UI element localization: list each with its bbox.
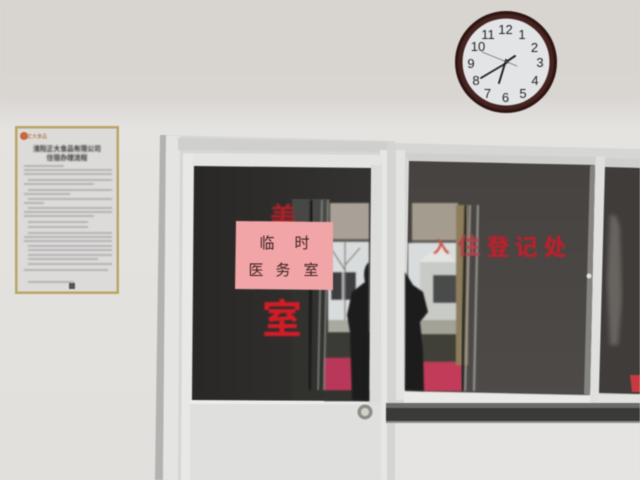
door glass: 美 <box>270 202 296 232</box>
clock numerals: 7 <box>484 86 491 101</box>
temporary clinic paper sign: 临 <box>259 235 275 252</box>
clock numerals: 1 <box>518 27 526 42</box>
clock numerals: 8 <box>472 73 480 88</box>
window glass left pane <box>405 161 595 395</box>
temporary clinic paper sign: 务 <box>275 262 291 279</box>
clock numerals: 12 <box>498 22 513 37</box>
poster logo <box>20 132 28 140</box>
poster heading: 淮阳正大食品有限公司 <box>33 144 101 153</box>
window glass right pane <box>599 167 640 394</box>
clock numerals: 3 <box>536 55 544 70</box>
door outer frame <box>155 135 395 480</box>
clock numerals: 10 <box>471 39 485 54</box>
clock numerals: 2 <box>531 40 538 55</box>
clock numerals: 5 <box>519 86 527 101</box>
silhouette reflection right of door <box>405 272 428 391</box>
notice poster: 正大食品 <box>27 133 47 140</box>
door leaf <box>181 153 382 480</box>
wall clock <box>455 11 557 113</box>
door knob <box>358 404 372 420</box>
red window lettering: 住 <box>458 233 480 259</box>
notice poster <box>15 126 119 294</box>
temporary clinic paper sign: 医 <box>248 262 264 279</box>
window latch <box>586 274 592 278</box>
temporary clinic paper sign: 时 <box>294 235 310 252</box>
sliding door rails <box>465 205 478 391</box>
notice poster: 住宿办理流程 <box>47 153 88 162</box>
red window lettering: 处 <box>544 234 566 260</box>
clock numerals <box>467 22 544 105</box>
door glass <box>192 166 371 401</box>
door handles reflection <box>318 200 328 390</box>
outdoor view through door <box>324 203 369 401</box>
red window lettering: 入 <box>432 238 450 257</box>
clock numerals: 6 <box>502 90 509 105</box>
outdoor view through window <box>408 203 468 391</box>
clock numerals: 4 <box>531 73 539 88</box>
clock numerals: 11 <box>481 27 495 42</box>
temporary clinic paper sign: 室 <box>303 262 319 279</box>
clock hands <box>481 52 517 83</box>
red window lettering: 登 <box>486 234 510 260</box>
silhouette reflection <box>347 262 369 401</box>
poster body text <box>24 166 112 282</box>
red window lettering <box>432 233 566 260</box>
temporary clinic paper sign <box>235 221 333 290</box>
window frame <box>395 143 640 408</box>
clock numerals: 9 <box>467 56 475 71</box>
red door lettering: 室 <box>262 298 302 342</box>
poster footer logo <box>69 283 75 289</box>
window ledge <box>386 403 640 423</box>
red window lettering: 记 <box>514 234 538 260</box>
